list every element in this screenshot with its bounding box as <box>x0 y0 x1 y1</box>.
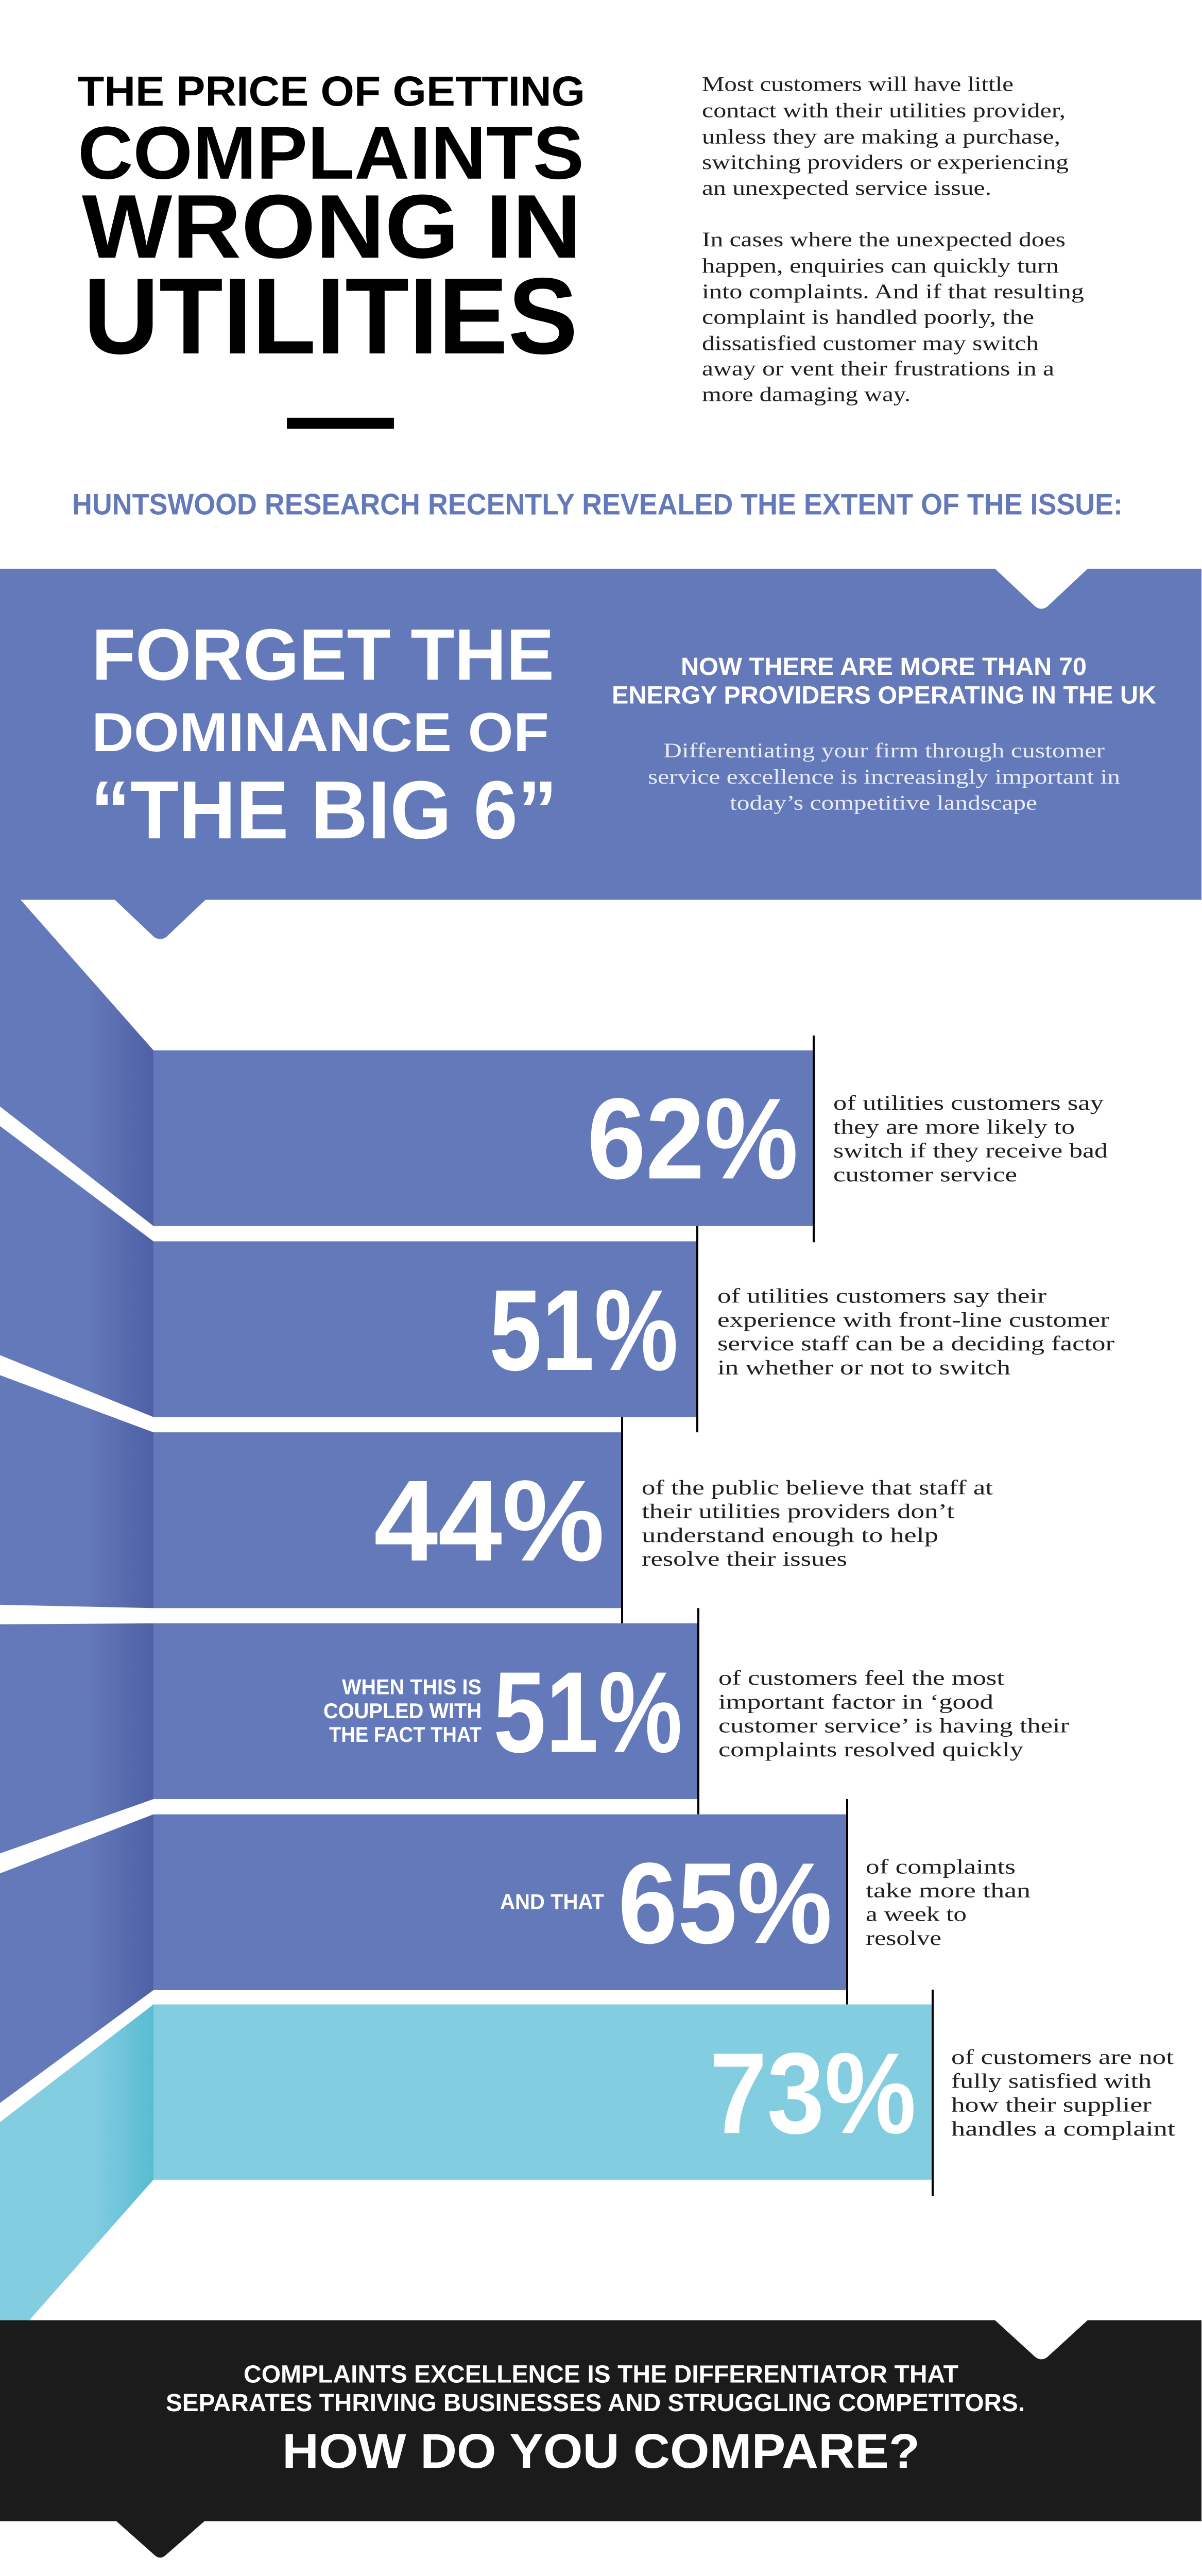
description 44: understand enough to help <box>642 1523 938 1547</box>
panel body text <box>648 739 1120 815</box>
intro paragraph 2: dissatisfied customer may switch <box>702 332 1039 355</box>
description 51 <box>717 1284 1114 1379</box>
intro paragraph 1: unless they are making a purchase, <box>702 125 1060 148</box>
percentage 44: 44% <box>374 1456 605 1585</box>
intro paragraph 1: switching providers or experiencing <box>702 151 1069 174</box>
intro paragraph 2: In cases where the unexpected does <box>702 228 1066 251</box>
closing statement: COMPLAINTS EXCELLENCE IS THE DIFFERENTIATOR THAT <box>244 2360 958 2388</box>
description 62: of utilities customers say <box>833 1092 1104 1115</box>
title <box>78 67 585 377</box>
intro paragraph 2: complaint is handled poorly, the <box>702 306 1034 329</box>
description 65: take more than <box>866 1879 1031 1902</box>
description 73: of customers are not <box>951 2046 1174 2069</box>
closing statement <box>166 2360 1025 2417</box>
description 51 second: customer service’ is having their <box>718 1714 1069 1737</box>
description 62: they are more likely to <box>833 1115 1075 1139</box>
description 73: how their supplier <box>951 2093 1152 2116</box>
intro paragraph 1: contact with their utilities provider, <box>702 99 1066 122</box>
intro paragraph 1: an unexpected service issue. <box>702 177 991 200</box>
percentage 73: 73% <box>710 2029 916 2158</box>
panel heading: FORGET THE <box>92 615 554 696</box>
percentage 51 second: 51% <box>493 1648 682 1777</box>
description 65: of complaints <box>866 1855 1016 1878</box>
description 51 second: complaints resolved quickly <box>718 1738 1024 1761</box>
panel subheading: ENERGY PROVIDERS OPERATING IN THE UK <box>612 681 1156 709</box>
stat row: 73% highlighted <box>153 1990 1175 2196</box>
panel body text: Differentiating your firm through customer <box>663 739 1105 762</box>
percentage 65: 65% <box>618 1839 832 1968</box>
description 73: fully satisfied with <box>951 2070 1152 2093</box>
lead-in label: COUPLED WITH <box>323 1699 482 1723</box>
description 73: handles a complaint <box>951 2117 1175 2140</box>
lead-in label: WHEN THIS IS <box>342 1675 482 1699</box>
stat row: 51% resolved quickly <box>153 1608 1069 1815</box>
title: THE PRICE OF GETTING <box>78 67 585 115</box>
description 65: a week to <box>866 1903 967 1926</box>
title: UTILITIES <box>83 255 578 377</box>
description 65: resolve <box>866 1926 941 1950</box>
percentage 62: 62% <box>587 1075 798 1203</box>
description 51 second <box>718 1667 1069 1761</box>
panel heading <box>91 615 557 856</box>
stat row: 44% <box>153 1417 993 1623</box>
title: COMPLAINTS <box>78 111 584 195</box>
title underline bar <box>287 418 394 429</box>
panel subheading: NOW THERE ARE MORE THAN 70 <box>681 653 1087 681</box>
description 62 <box>833 1092 1108 1186</box>
lead-in label <box>323 1675 482 1747</box>
lead-in label: THE FACT THAT <box>329 1723 482 1747</box>
percentage 51: 51% <box>489 1266 678 1395</box>
intro paragraph 1 <box>702 73 1069 200</box>
panel body text: today’s competitive landscape <box>730 791 1037 815</box>
panel heading: “THE BIG 6” <box>91 764 557 856</box>
panel subheading <box>612 653 1156 709</box>
intro paragraph 2: happen, enquiries can quickly turn <box>702 254 1059 277</box>
description 73 <box>951 2046 1175 2140</box>
call to action: HOW DO YOU COMPARE? <box>282 2424 920 2478</box>
description 51: experience with front-line customer <box>717 1308 1109 1331</box>
panel body text: service excellence is increasingly important in <box>648 765 1120 788</box>
panel heading: DOMINANCE OF <box>92 702 549 763</box>
description 44: their utilities providers don’t <box>642 1500 954 1523</box>
description 51 second: important factor in ‘good <box>718 1690 993 1714</box>
stat row: 65% <box>153 1799 1031 2005</box>
panel: how do you compare <box>0 2320 1201 2557</box>
description 44: resolve their issues <box>642 1547 847 1571</box>
description 44 <box>642 1476 993 1571</box>
intro paragraph 2: away or vent their frustrations in a <box>702 357 1054 380</box>
intro paragraph 1: Most customers will have little <box>702 73 1014 96</box>
ribbon segments <box>0 900 153 2320</box>
description 51: of utilities customers say their <box>717 1284 1046 1308</box>
lead-in label: AND THAT <box>500 1890 604 1914</box>
description 44: of the public believe that staff at <box>642 1476 993 1499</box>
intro paragraph 2 <box>702 228 1084 406</box>
description 62: switch if they receive bad <box>833 1139 1108 1162</box>
stat row: 62% <box>153 1036 1108 1242</box>
intro paragraph 2: into complaints. And if that resulting <box>702 280 1084 303</box>
panel: forget the big 6 <box>0 569 1201 939</box>
intro paragraph 2: more damaging way. <box>702 383 911 406</box>
description 51 second: of customers feel the most <box>718 1667 1004 1690</box>
description 62: customer service <box>833 1163 1017 1186</box>
description 51: in whether or not to switch <box>717 1356 1010 1379</box>
description 65 <box>866 1855 1031 1950</box>
title: WRONG IN <box>82 176 581 277</box>
stat row: 51% deciding factor <box>153 1226 1114 1432</box>
closing statement: SEPARATES THRIVING BUSINESSES AND STRUGGLING COMPETITORS. <box>166 2389 1025 2417</box>
description 51: service staff can be a deciding factor <box>717 1332 1114 1355</box>
